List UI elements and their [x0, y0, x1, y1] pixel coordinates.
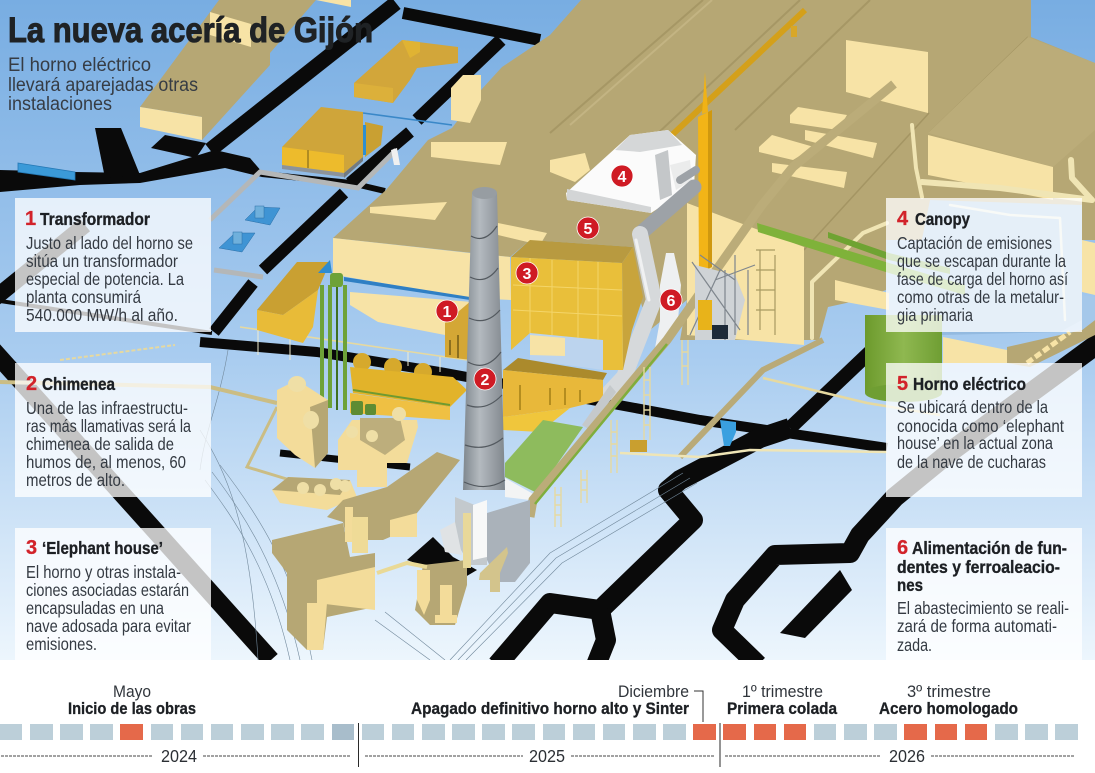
panel: 1 Transformador: especial de potencia. La [26, 269, 184, 289]
panel: 1 Transformador [15, 198, 211, 332]
month squares [0, 724, 1078, 740]
panel: 2 Chimenea: metros de alto. [26, 470, 125, 490]
panel: 1 Transformador: Transformador [40, 209, 150, 229]
milestone: Diciembre: Apagado definitivo horno alto y Sinter [411, 700, 690, 718]
scaffold towers [555, 340, 688, 527]
milestone: Primera colada [727, 683, 838, 718]
silo near marker 6 [655, 253, 681, 348]
year dividers [358, 723, 720, 767]
cream pipes [812, 125, 1092, 338]
panel: 5 Horno eléctrico [886, 363, 1082, 497]
small green tanks [351, 401, 376, 415]
blue transformers yard [219, 206, 280, 252]
panel: 5 Horno eléctrico: de la nave de cucharas [897, 452, 1046, 472]
panel: 6 Alimentación: zada. [897, 635, 932, 655]
markers [436, 165, 682, 390]
building cluster lower left [272, 376, 467, 650]
milestone: Acero homologado: 3º trimestre [907, 683, 991, 701]
marker 5 [577, 217, 599, 239]
conveyor [530, 84, 894, 517]
grey bridges [210, 150, 396, 277]
icon: blue platform [18, 163, 75, 180]
subtitle: instalaciones [8, 94, 112, 115]
marker 1 [436, 300, 458, 322]
sky behind panel 4 [905, 200, 1082, 335]
marker 3 [516, 262, 538, 284]
milestone: Primera colada: 1º trimestre [742, 683, 823, 701]
panel: 6 Alimentación: 6 [897, 537, 908, 559]
chimney [463, 187, 505, 490]
roof ridges [550, 0, 1028, 250]
milestone: Acero homologado: Acero homologado [879, 700, 1018, 718]
panel: 2 Chimenea: humos de, al menos, 60 [26, 452, 186, 472]
subtitle: El horno eléctrico [8, 55, 151, 76]
gold box left of chimney [350, 353, 467, 420]
gold near marker 1 [445, 300, 472, 360]
panel: 4 Canopy: como otras de la metalur- [897, 287, 1064, 307]
gas duct [610, 170, 696, 392]
panel: 2 Chimenea: ras más llamativas será la [26, 416, 191, 436]
panel: 5 Horno eléctrico: Horno eléctrico [913, 374, 1026, 394]
crane and yellow tower [672, 10, 805, 273]
panel: 2 Chimenea: Una de las infraestructu- [26, 398, 188, 418]
panel: 1 Transformador: planta consumirá [26, 287, 141, 307]
milestone: Diciembre: Diciembre [618, 683, 689, 701]
marker 6: 6 [667, 293, 676, 310]
panel: 1 Transformador: Justo al lado del horno se [26, 233, 193, 253]
gold box right of chimney [503, 358, 607, 432]
milestone: Primera colada: Primera colada [727, 700, 838, 718]
timeline [0, 660, 1095, 773]
milestone: Mayo [68, 683, 196, 718]
panel: 4 Canopy [886, 198, 1082, 332]
panel: 3 Elephant house: emisiones. [26, 634, 97, 654]
subtitle: llevará aparejadas otras [8, 75, 198, 96]
panel: 2 Chimenea: chimenea de salida de [26, 434, 174, 454]
marker 6 [660, 289, 682, 311]
dashed year rules [1, 755, 1075, 757]
year labels: 2026 [889, 746, 925, 766]
green pipes [757, 223, 965, 295]
milestone: Mayo: Inicio de las obras [68, 700, 196, 718]
panel: 3 Elephant house: encapsuladas en una [26, 598, 164, 618]
panel: 1 Transformador: 1 [25, 208, 36, 230]
elephant house [511, 240, 643, 370]
marker 5: 5 [584, 221, 593, 238]
green roof [505, 385, 616, 500]
milestone: Diciembre [411, 683, 703, 722]
panel: 6 Alimentación [886, 528, 1082, 660]
panel: 2 Chimenea: 2 [26, 373, 37, 395]
panel: 5 Horno eléctrico: house’ en la actual zona [897, 433, 1053, 453]
panel: 3 Elephant house: 3 [26, 537, 37, 559]
marker 2 [474, 368, 496, 390]
marker 1: 1 [443, 304, 452, 321]
panel: 3 Elephant house [15, 528, 211, 660]
chimney base [440, 497, 530, 592]
panel: 3 Elephant house: ciones asociadas estarán [26, 580, 189, 600]
contour lines [200, 350, 697, 660]
panel: 3 Elephant house: nave adosada para evitar [26, 616, 191, 636]
panel: 5 Horno eléctrico: 5 [897, 373, 908, 395]
subtitle [8, 55, 198, 115]
green tower [318, 260, 345, 410]
panel: 6 Alimentación: nes [897, 575, 923, 595]
panel: 4 Canopy: Captación de emisiones [897, 233, 1052, 253]
panel: 2 Chimenea: Chimenea [42, 374, 115, 394]
cream walls and skylights [333, 40, 1095, 363]
panel: 4 Canopy: 4 [897, 208, 909, 230]
marker 3: 3 [523, 266, 532, 283]
roof mass of existing steelworks [333, 0, 1095, 340]
panel: 1 Transformador: sitúa un transformador [26, 251, 178, 271]
milestone: Mayo: Mayo [113, 683, 151, 701]
year labels [161, 746, 925, 766]
marker 2: 2 [481, 372, 490, 389]
year labels: 2025 [529, 746, 565, 766]
panel: 6 Alimentación: Alimentación de fun- [912, 538, 1067, 558]
green tank [865, 315, 942, 402]
panel: 4 Canopy: gia primaria [897, 305, 973, 325]
panel: 5 Horno eléctrico: Se ubicará dentro de la [897, 397, 1048, 417]
panel: 5 Horno eléctrico: conocida como ‘elephant [897, 416, 1064, 436]
panel: 2 Chimenea [15, 363, 211, 497]
panel: 6 Alimentación: zará de forma automati- [897, 616, 1057, 636]
scaffold works by wall [690, 250, 775, 340]
gold building left [257, 262, 330, 343]
panel: 6 Alimentación: dentes y ferroaleacio- [897, 557, 1060, 577]
building: top-left block [140, 0, 351, 140]
panel: 3 Elephant house: ‘Elephant house’ [42, 538, 163, 558]
bridges [0, 327, 940, 480]
milestone: Acero homologado [879, 683, 1018, 718]
panel: 3 Elephant house: El horno y otras instala- [26, 562, 181, 582]
marker 4 [611, 165, 633, 187]
gold buildings top [282, 40, 458, 178]
marker 4: 4 [618, 169, 627, 186]
year labels: 2024 [161, 746, 197, 766]
title: La nueva acería de Gijón [8, 11, 373, 50]
blue stripe on wall [344, 277, 470, 300]
canopy [566, 130, 696, 213]
panel: 4 Canopy: Canopy [915, 209, 970, 229]
panel: 1 Transformador: 540.000 MW/h al año. [26, 305, 178, 325]
